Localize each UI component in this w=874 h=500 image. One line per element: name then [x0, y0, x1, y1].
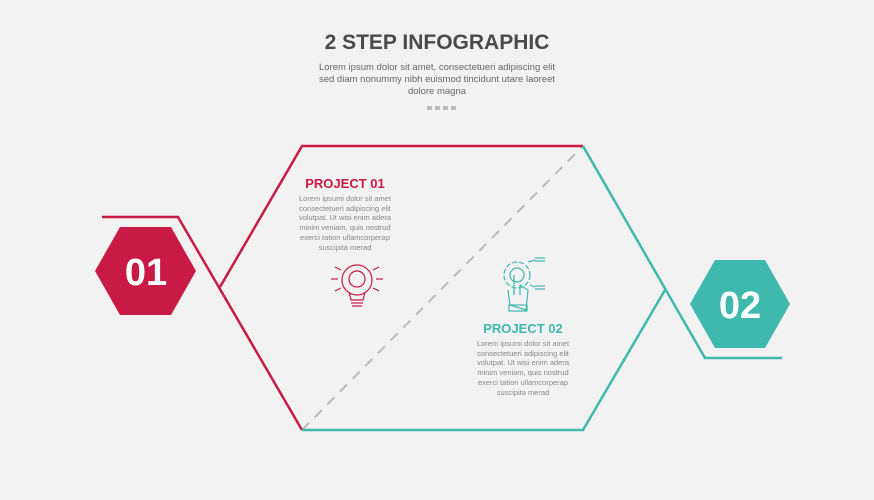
project 02 text	[477, 321, 569, 397]
heading 01: PROJECT 01	[305, 176, 385, 191]
icon: lightbulb	[331, 265, 383, 306]
subtitle: Lorem ipsum dolor sit amet, consectetueri adipiscing elit sed diam nonummy nibh euismod tincidunt utare laoreet dolore magna	[319, 62, 555, 97]
dots decoration	[427, 106, 456, 110]
teal outline	[302, 146, 782, 430]
project 01 text	[299, 176, 391, 252]
red outline	[102, 146, 583, 430]
badge 02: 02	[719, 285, 761, 327]
title: 2 STEP INFOGRAPHIC	[325, 31, 549, 54]
dashed divider	[302, 146, 583, 430]
body 01: Lorem ipsumi dolor sit amet consectetueri adipiscing elit volutpat. Ut wisi enim adera minim veniam, quis nostrud exerci tation ullamcorperap suscipita merad	[299, 194, 391, 252]
body 02: Lorem ipsumi dolor sit amet consectetueri adipiscing elit volutpat. Ut wisi enim adera minim veniam, quis nostrud exerci tation ullamcorperap suscipita merad	[477, 339, 569, 397]
badge 02	[690, 260, 790, 348]
heading 02: PROJECT 02	[483, 321, 563, 336]
badge 01: 01	[125, 252, 167, 294]
icon: gear hand	[504, 258, 545, 311]
badge 01	[95, 227, 196, 315]
